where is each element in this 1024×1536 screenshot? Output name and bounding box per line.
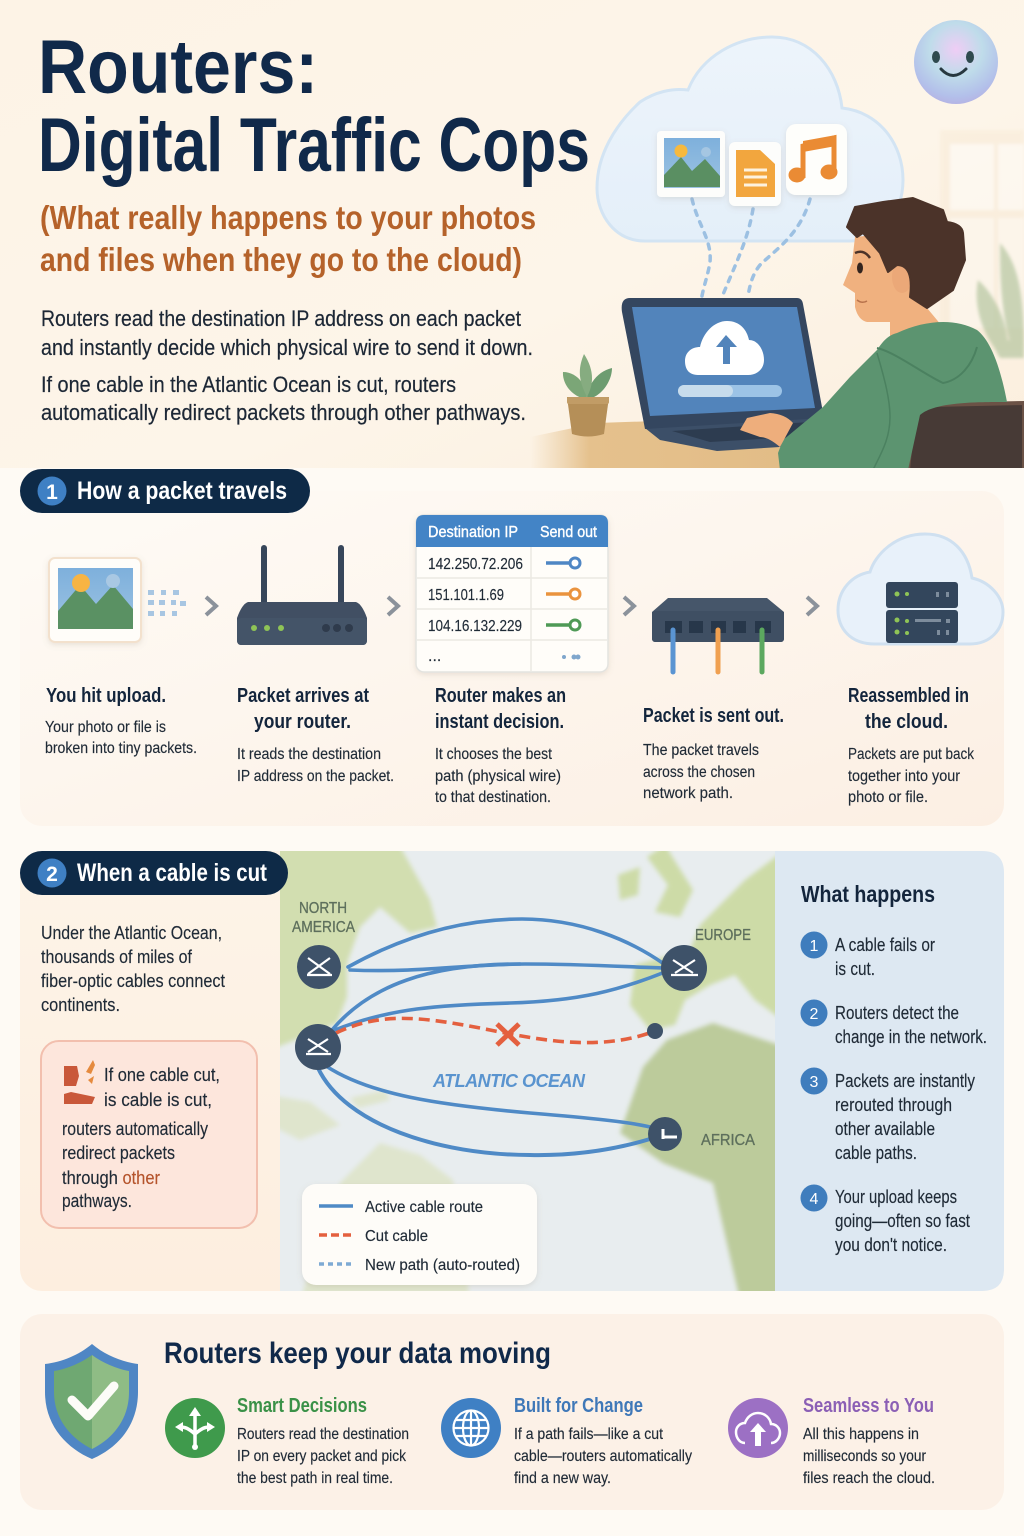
callout: redirect: through other bbox=[62, 1168, 160, 1188]
step text: packet sent: Packet is sent out. bbox=[643, 705, 784, 727]
step text: you hit upload bbox=[45, 685, 197, 757]
seamless to you: All this happens in bbox=[803, 1426, 919, 1443]
step text: you hit upload: You hit upload. bbox=[46, 685, 166, 707]
seamless to you: milliseconds so your bbox=[803, 1448, 927, 1465]
smart decisions: IP on every packet and pick bbox=[237, 1448, 407, 1465]
map labels: NORTH bbox=[299, 900, 347, 917]
legend: New path (auto-routed) bbox=[365, 1257, 520, 1274]
cut marker bbox=[497, 1024, 519, 1045]
subtitle bbox=[40, 199, 536, 278]
what happens step 2: change in the network. bbox=[835, 1027, 987, 1047]
what happens step 4: you don't notice. bbox=[835, 1235, 947, 1255]
map labels: AMERICA bbox=[292, 919, 355, 936]
callout: redirect: If one cable cut, bbox=[104, 1065, 220, 1085]
land masses bbox=[270, 841, 785, 1300]
map labels bbox=[292, 900, 755, 1149]
heading: Routers keep your data moving bbox=[164, 1337, 551, 1370]
subtitle: (What really happens to your photos bbox=[40, 199, 536, 236]
callout: redirect: routers automatically bbox=[62, 1119, 208, 1139]
land: europe bbox=[618, 845, 785, 1030]
music card bbox=[786, 124, 847, 195]
assistant orb bbox=[914, 20, 998, 104]
what happens step 4: Your upload keeps bbox=[835, 1187, 957, 1207]
step text: packet arrives: your router. bbox=[254, 711, 351, 733]
title: Routers: bbox=[38, 25, 318, 110]
background plant bbox=[977, 243, 1024, 358]
section 2 heading pill: When a cable is cut bbox=[77, 859, 268, 887]
title: Digital Traffic Cops bbox=[38, 103, 590, 188]
laptop bbox=[622, 298, 835, 451]
screen upload icon bbox=[678, 321, 782, 397]
panel: routers keep your data moving bbox=[20, 1314, 1004, 1510]
built for change bbox=[441, 1395, 692, 1487]
seamless to you bbox=[728, 1395, 935, 1487]
step text: router decision bbox=[435, 685, 566, 806]
intro text bbox=[41, 306, 533, 425]
map labels: EUROPE bbox=[695, 927, 751, 944]
step text: packet arrives bbox=[237, 685, 394, 785]
what happens step 3: 3 bbox=[810, 1074, 819, 1091]
icon: router bbox=[237, 545, 367, 645]
person bbox=[740, 198, 1007, 470]
room window bbox=[942, 132, 1022, 219]
step text: reassembled: together into your bbox=[848, 768, 961, 785]
routing table: Send out bbox=[540, 524, 597, 541]
arrow 3 bbox=[624, 597, 634, 615]
desk bbox=[536, 422, 780, 468]
built for change: cable—routers automatically bbox=[514, 1448, 692, 1465]
legend bbox=[302, 1184, 537, 1285]
routing table: 151.101.1.69 bbox=[428, 587, 504, 604]
atlantic text: thousands of miles of bbox=[41, 947, 193, 967]
routing table bbox=[416, 515, 608, 672]
step text: packet arrives: IP address on the packet. bbox=[237, 768, 394, 785]
seamless to you: files reach the cloud. bbox=[803, 1470, 935, 1487]
subtitle: and files when they go to the cloud) bbox=[40, 241, 522, 278]
step text: router decision: It chooses the best bbox=[435, 746, 552, 763]
what happens step 1: A cable fails or bbox=[835, 935, 935, 955]
legend: Cut cable bbox=[365, 1228, 428, 1245]
what happens step 2: Routers detect the bbox=[835, 1003, 959, 1023]
cloud bbox=[597, 37, 903, 241]
smart decisions: Smart Decisions bbox=[237, 1395, 367, 1417]
icon: cloud server bbox=[838, 534, 1003, 644]
step text: packet sent: across the chosen bbox=[643, 764, 755, 781]
built for change: If a path fails—like a cut bbox=[514, 1426, 663, 1443]
step text: reassembled bbox=[848, 685, 975, 806]
routing table: ... bbox=[428, 648, 441, 665]
built for change: find a new way. bbox=[514, 1470, 611, 1487]
step text: you hit upload: broken into tiny packets. bbox=[45, 740, 197, 757]
section 2 heading pill: 2 bbox=[46, 863, 58, 886]
right panel background bbox=[775, 851, 1004, 1291]
active cables bbox=[318, 919, 665, 1155]
step text: reassembled: the cloud. bbox=[865, 711, 948, 733]
what happens step 1 bbox=[800, 932, 935, 979]
what happens step 4: going—often so fast bbox=[835, 1211, 970, 1231]
intro text: automatically redirect packets through other pathways. bbox=[41, 400, 526, 425]
potted plant bbox=[563, 354, 612, 436]
step text: reassembled: Packets are put back bbox=[848, 746, 975, 763]
router node: africa bbox=[648, 1117, 682, 1151]
step text: packet sent: network path. bbox=[643, 785, 733, 802]
smart decisions bbox=[165, 1395, 409, 1487]
map labels: AFRICA bbox=[701, 1132, 755, 1149]
what happens step 2 bbox=[800, 1000, 987, 1047]
seamless to you: Seamless to You bbox=[803, 1395, 934, 1417]
atlantic text: continents. bbox=[41, 995, 120, 1015]
step text: router decision: Router makes an bbox=[435, 685, 566, 707]
title bbox=[38, 25, 590, 188]
routing table: 142.250.72.206 bbox=[428, 556, 523, 573]
step 1 heading pill: 1 bbox=[46, 481, 58, 504]
section 2 heading pill bbox=[20, 851, 288, 895]
photo card bbox=[657, 131, 725, 197]
step text: router decision: path (physical wire) bbox=[435, 768, 561, 785]
what happens step 3: Packets are instantly bbox=[835, 1071, 975, 1091]
routing table: Destination IP bbox=[428, 524, 518, 541]
built for change: Built for Change bbox=[514, 1395, 643, 1417]
step text: packet arrives: It reads the destination bbox=[237, 746, 381, 763]
what happens step 4 bbox=[800, 1184, 970, 1255]
step text: you hit upload: Your photo or file is bbox=[45, 719, 166, 736]
callout: redirect: pathways. bbox=[62, 1191, 132, 1211]
router node: europe bbox=[661, 945, 707, 991]
legend: Active cable route bbox=[365, 1199, 483, 1216]
smart decisions: Routers read the destination bbox=[237, 1426, 409, 1443]
intro text: and instantly decide which physical wire to send it down. bbox=[41, 335, 533, 360]
icon: photo with packets bbox=[49, 558, 186, 642]
step text: packet sent bbox=[643, 705, 784, 802]
arrow 4 bbox=[807, 597, 817, 615]
cut cable bbox=[336, 1018, 655, 1043]
dashed upload streams bbox=[692, 199, 810, 297]
what happens heading: What happens bbox=[801, 881, 935, 907]
what happens step 1: is cut. bbox=[835, 959, 875, 979]
router node: north america north bbox=[297, 945, 341, 989]
what happens step 1: 1 bbox=[810, 938, 819, 955]
hero illustration bbox=[530, 37, 1024, 470]
step text: packet sent: The packet travels bbox=[643, 742, 759, 759]
step text: reassembled: photo or file. bbox=[848, 789, 928, 806]
icon: shield bbox=[45, 1344, 138, 1459]
step text: router decision: to that destination. bbox=[435, 789, 551, 806]
atlantic text bbox=[41, 923, 225, 1015]
step text: packet arrives: Packet arrives at bbox=[237, 685, 369, 707]
smart decisions: the best path in real time. bbox=[237, 1470, 393, 1487]
chair bbox=[908, 403, 1024, 470]
what happens step 3: cable paths. bbox=[835, 1143, 917, 1163]
land: south america and caribbean bbox=[270, 1090, 470, 1300]
routing table: 104.16.132.229 bbox=[428, 618, 522, 635]
panel: how a packet travels bbox=[20, 469, 1004, 826]
arrow 2 bbox=[388, 597, 398, 615]
router node: gibraltar bbox=[647, 1023, 663, 1039]
router node: north america south bbox=[295, 1024, 341, 1070]
what happens step 4: 4 bbox=[810, 1191, 819, 1208]
step 1 heading pill: How a packet travels bbox=[77, 477, 287, 505]
panel: when a cable is cut bbox=[20, 841, 1004, 1300]
ocean label: ATLANTIC OCEAN bbox=[432, 1071, 586, 1091]
arrow 1 bbox=[206, 597, 216, 615]
land: africa bbox=[620, 1023, 785, 1300]
step text: reassembled: Reassembled in bbox=[848, 685, 969, 707]
callout: redirect bbox=[41, 1041, 257, 1228]
step 1 heading pill bbox=[20, 469, 310, 513]
what happens step 3: rerouted through bbox=[835, 1095, 952, 1115]
what happens step 3 bbox=[800, 1068, 975, 1163]
callout: redirect: is cable is cut, bbox=[104, 1090, 212, 1110]
land: north america bbox=[280, 851, 438, 1048]
hero background bbox=[0, 0, 1024, 468]
callout: redirect: redirect packets bbox=[62, 1143, 175, 1163]
step text: router decision: instant decision. bbox=[435, 711, 564, 733]
icon: switch with cables bbox=[652, 598, 784, 672]
what happens step 2: 2 bbox=[810, 1006, 819, 1023]
intro text: If one cable in the Atlantic Ocean is cut, routers bbox=[41, 372, 456, 397]
atlantic text: fiber-optic cables connect bbox=[41, 971, 225, 991]
what happens step 3: other available bbox=[835, 1119, 935, 1139]
map bbox=[270, 841, 785, 1300]
atlantic text: Under the Atlantic Ocean, bbox=[41, 923, 222, 943]
icon: broken cable bbox=[64, 1060, 95, 1104]
intro text: Routers read the destination IP address on each packet bbox=[41, 306, 521, 331]
document card bbox=[729, 142, 781, 206]
